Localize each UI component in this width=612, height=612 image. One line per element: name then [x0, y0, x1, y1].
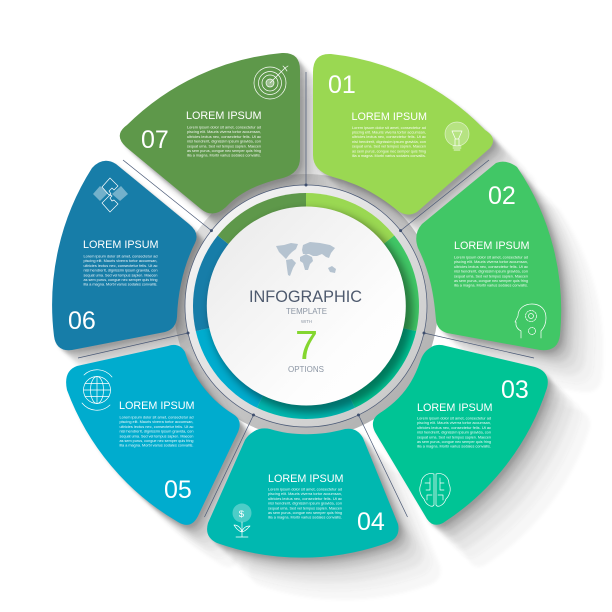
panel 02 text: 02: [488, 182, 516, 210]
panel 01 text: ultricies lectus nec, consectetur felis. Ut ac: [352, 135, 426, 139]
panel 02 text: Lorem ipsum dolor sit amet, consectetur ad: [454, 256, 528, 260]
panel 03 text: 03: [501, 376, 529, 404]
panel 03 text: as sem purus, congue nec semper quis fring: [417, 440, 491, 444]
long panel shadows: [55, 56, 603, 600]
panel 05 text: LOREM IPSUM: [119, 400, 195, 412]
panel 06 text: Lorem ipsum dolor sit amet, consectetur ad: [84, 254, 158, 258]
panel 05 text: Lorem ipsum dolor sit amet, consectetur ad: [120, 416, 194, 420]
panel 03 text: illa a magna. Morbi varius sodales convallis.: [417, 445, 491, 449]
panel 02 text: ultricies lectus nec, consectetur felis. Ut ac: [454, 265, 528, 269]
panel 01 text: LOREM IPSUM: [352, 111, 427, 123]
panel 03 text: [417, 376, 529, 449]
panel 04 text: as sem purus, congue nec semper quis fring: [268, 511, 342, 515]
panel 01 text: sequat urna. Sed vel tempus sapien. Maecen: [352, 145, 426, 149]
icon: puzzle pieces: [93, 178, 128, 212]
panel shapes: [52, 53, 561, 558]
panel 06 text: LOREM IPSUM: [83, 239, 159, 251]
icon: light bulb: [445, 122, 469, 150]
panel 01 text: 01: [328, 71, 356, 99]
panel 02 text: LOREM IPSUM: [454, 240, 530, 252]
panel 04 text: piscing elit. Mauris viverra tortor accumsan,: [268, 492, 342, 496]
panel 05 text: ultricies lectus nec, consectetur felis. Ut ac: [120, 425, 194, 429]
center number 7: 7: [295, 322, 318, 368]
panel 03 text: LOREM IPSUM: [417, 402, 493, 414]
panel 02 text: [454, 182, 530, 288]
panel 07 text: piscing elit. Mauris viverra tortor accumsan,: [187, 130, 261, 134]
panel 04 text: nisi hendrerit, dignissim ipsum gravida, con: [268, 502, 342, 506]
center with label: WITH: [301, 319, 312, 324]
panel 02 text: nisi hendrerit, dignissim ipsum gravida, con: [454, 270, 528, 274]
panel 07 text: Lorem ipsum dolor sit amet, consectetur ad: [187, 126, 261, 130]
icon: head with gears: [515, 304, 546, 338]
center options label: OPTIONS: [288, 365, 324, 374]
panel 06 text: ultricies lectus nec, consectetur felis. Ut ac: [84, 264, 158, 268]
panel 06 text: sequat urna. Sed vel tempus sapien. Maecen: [84, 273, 158, 277]
panel 02 text: illa a magna. Morbi varius sodales convallis.: [454, 284, 528, 288]
panel 02 text: as sem purus, congue nec semper quis fring: [454, 279, 528, 283]
panel 07 text: LOREM IPSUM: [186, 110, 262, 122]
panel 01 text: Lorem ipsum dolor sit amet, consectetur ad: [352, 126, 426, 130]
panel 06 text: illa a magna. Morbi varius sodales convallis.: [84, 283, 158, 287]
icon: dollar plant: $: [239, 509, 245, 520]
panel 07 text: 07: [141, 126, 169, 154]
panel 02 text: sequat urna. Sed vel tempus sapien. Maecen: [454, 274, 528, 278]
icon: globe: [82, 370, 112, 410]
icon: brain: [420, 474, 450, 506]
world map: [276, 242, 336, 276]
panel 05 text: illa a magna. Morbi varius sodales convallis.: [120, 444, 194, 448]
center title: INFOGRAPHIC: [249, 288, 362, 306]
icon: target with arrow: [254, 66, 288, 99]
panel 06 text: nisi hendrerit, dignissim ipsum gravida, con: [84, 269, 158, 273]
panel 07 text: [141, 110, 262, 158]
panel 04 text: Lorem ipsum dolor sit amet, consectetur ad: [268, 488, 342, 492]
panel 03 text: Lorem ipsum dolor sit amet, consectetur ad: [417, 416, 491, 420]
panel 04 text: 04: [357, 508, 385, 536]
center white disc: [207, 206, 406, 406]
panel 05 text: as sem purus, congue nec semper quis fring: [120, 439, 194, 443]
panel 07 text: nisi hendrerit, dignissim ipsum gravida, con: [187, 140, 261, 144]
panel 05 text: nisi hendrerit, dignissim ipsum gravida, con: [120, 430, 194, 434]
panel 01 text: nisi hendrerit, dignissim ipsum gravida, con: [352, 140, 426, 144]
panel 03 text: ultricies lectus nec, consectetur felis. Ut ac: [417, 426, 491, 430]
panel 01 text: piscing elit. Mauris viverra tortor accumsan,: [352, 130, 426, 134]
panel 06 text: 06: [68, 307, 96, 335]
panel 04 text: ultricies lectus nec, consectetur felis. Ut ac: [268, 497, 342, 501]
panel 01 text: as sem purus, congue nec semper quis fring: [352, 149, 426, 153]
icon: dollar plant: [232, 504, 252, 537]
panel 03 text: piscing elit. Mauris viverra tortor accumsan,: [417, 421, 491, 425]
panel 04 text: [268, 473, 385, 536]
panel 07 text: ultricies lectus nec, consectetur felis. Ut ac: [187, 135, 261, 139]
panel 07 text: as sem purus, congue nec semper quis fring: [187, 149, 261, 153]
panel 03 text: sequat urna. Sed vel tempus sapien. Maecen: [417, 435, 491, 439]
panel 06 text: piscing elit. Mauris viverra tortor accumsan,: [84, 259, 158, 263]
panel 04 text: sequat urna. Sed vel tempus sapien. Maecen: [268, 506, 342, 510]
panel 03 text: nisi hendrerit, dignissim ipsum gravida, con: [417, 431, 491, 435]
panel 07 text: illa a magna. Morbi varius sodales convallis.: [187, 154, 261, 158]
panel 01 text: [328, 71, 427, 158]
panel 05 text: piscing elit. Mauris viverra tortor accumsan,: [120, 420, 194, 424]
panel 06 text: [68, 239, 159, 335]
panel 05 text: 05: [164, 476, 192, 504]
segmented colour ring: [193, 193, 419, 419]
panel 05 text: sequat urna. Sed vel tempus sapien. Maecen: [120, 434, 194, 438]
center subtitle: TEMPLATE: [286, 306, 327, 316]
panel 05 text: [119, 400, 195, 504]
panel 06 text: as sem purus, congue nec semper quis fring: [84, 278, 158, 282]
panel 02 text: piscing elit. Mauris viverra tortor accumsan,: [454, 260, 528, 264]
divider lines and thin ring: [78, 72, 534, 517]
inner pale ring: [185, 185, 427, 427]
panel 01 text: illa a magna. Morbi varius sodales convallis.: [352, 154, 426, 158]
panel 04 text: illa a magna. Morbi varius sodales convallis.: [268, 516, 342, 520]
ring halo behind panels: [174, 174, 438, 438]
panel 04 text: LOREM IPSUM: [268, 473, 344, 485]
panel 07 text: sequat urna. Sed vel tempus sapien. Maecen: [187, 144, 261, 148]
